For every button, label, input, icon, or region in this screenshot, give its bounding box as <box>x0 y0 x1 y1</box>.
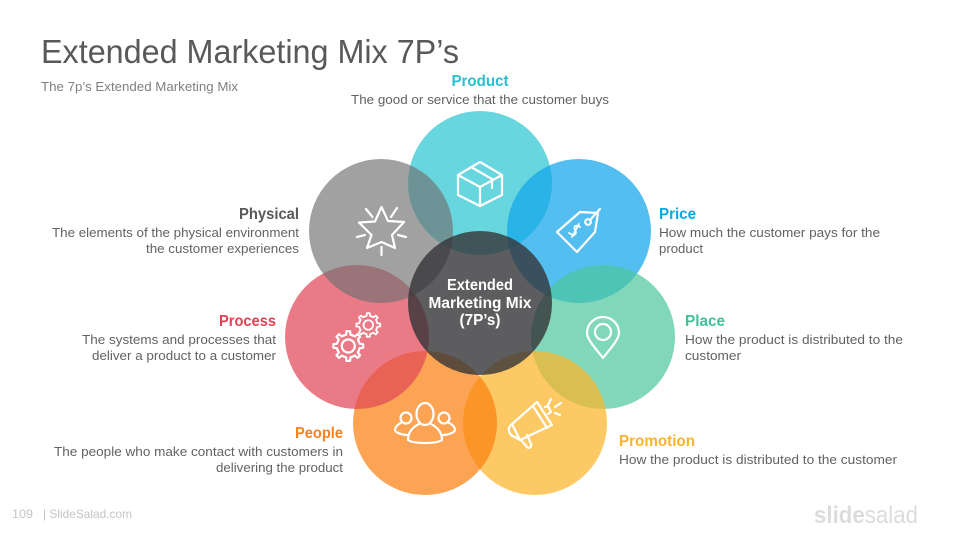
icon: map pin <box>587 317 619 358</box>
icon: gears <box>333 313 380 361</box>
circle: promotion <box>463 351 607 495</box>
label: place: How the product is distributed to the <box>685 333 903 347</box>
label: promotion <box>619 433 897 467</box>
footer: page number and site: | SlideSalad.com <box>43 507 132 521</box>
label: product: Product <box>452 73 509 90</box>
label: promotion: How the product is distributed to the customer <box>619 453 897 467</box>
center label: (7P’s) <box>460 312 500 329</box>
circle: price <box>507 159 651 303</box>
circle: place <box>531 265 675 409</box>
label: place: customer <box>685 349 741 363</box>
label: process: deliver a product to a customer <box>92 349 276 363</box>
label: price: product <box>659 242 704 256</box>
subtitle: The 7p’s Extended Marketing Mix <box>41 80 239 94</box>
label: price: How much the customer pays for the <box>659 226 880 240</box>
label: process: The systems and processes that <box>82 333 277 347</box>
label: promotion: Promotion <box>619 433 695 450</box>
icon: box <box>458 162 502 206</box>
label: process <box>82 313 277 363</box>
label: physical: Physical <box>239 206 299 223</box>
center label: Marketing Mix <box>428 295 532 312</box>
label: people: People <box>295 425 343 442</box>
icon: price tag <box>557 209 600 252</box>
icon: megaphone <box>509 399 561 448</box>
label: price: Price <box>659 206 696 223</box>
circle: process <box>285 265 429 409</box>
label: people <box>54 425 344 475</box>
circle: product <box>408 111 552 255</box>
label: product <box>351 73 609 107</box>
center label: Extended <box>447 277 513 294</box>
circle: people <box>353 351 497 495</box>
circle: physical <box>309 159 453 303</box>
label: physical: the customer experiences <box>146 242 299 256</box>
label: people: The people who make contact with customers in <box>54 445 343 459</box>
label: place <box>685 313 903 363</box>
logo: slidesalad: slidesalad <box>814 502 918 529</box>
title: Extended Marketing Mix 7P’s <box>41 33 459 70</box>
label: product: The good or service that the customer buys <box>351 93 609 107</box>
icon: star <box>357 207 406 255</box>
label: place: Place <box>685 313 725 330</box>
icon: people <box>395 403 455 443</box>
center label <box>428 277 532 329</box>
label: process: Process <box>219 313 276 330</box>
footer: page number and site: 109 <box>12 507 33 521</box>
label: physical <box>52 206 300 256</box>
label: physical: The elements of the physical environment <box>52 226 300 240</box>
circle: center <box>408 231 552 375</box>
label: people: delivering the product <box>216 461 344 475</box>
label: price <box>659 206 880 256</box>
